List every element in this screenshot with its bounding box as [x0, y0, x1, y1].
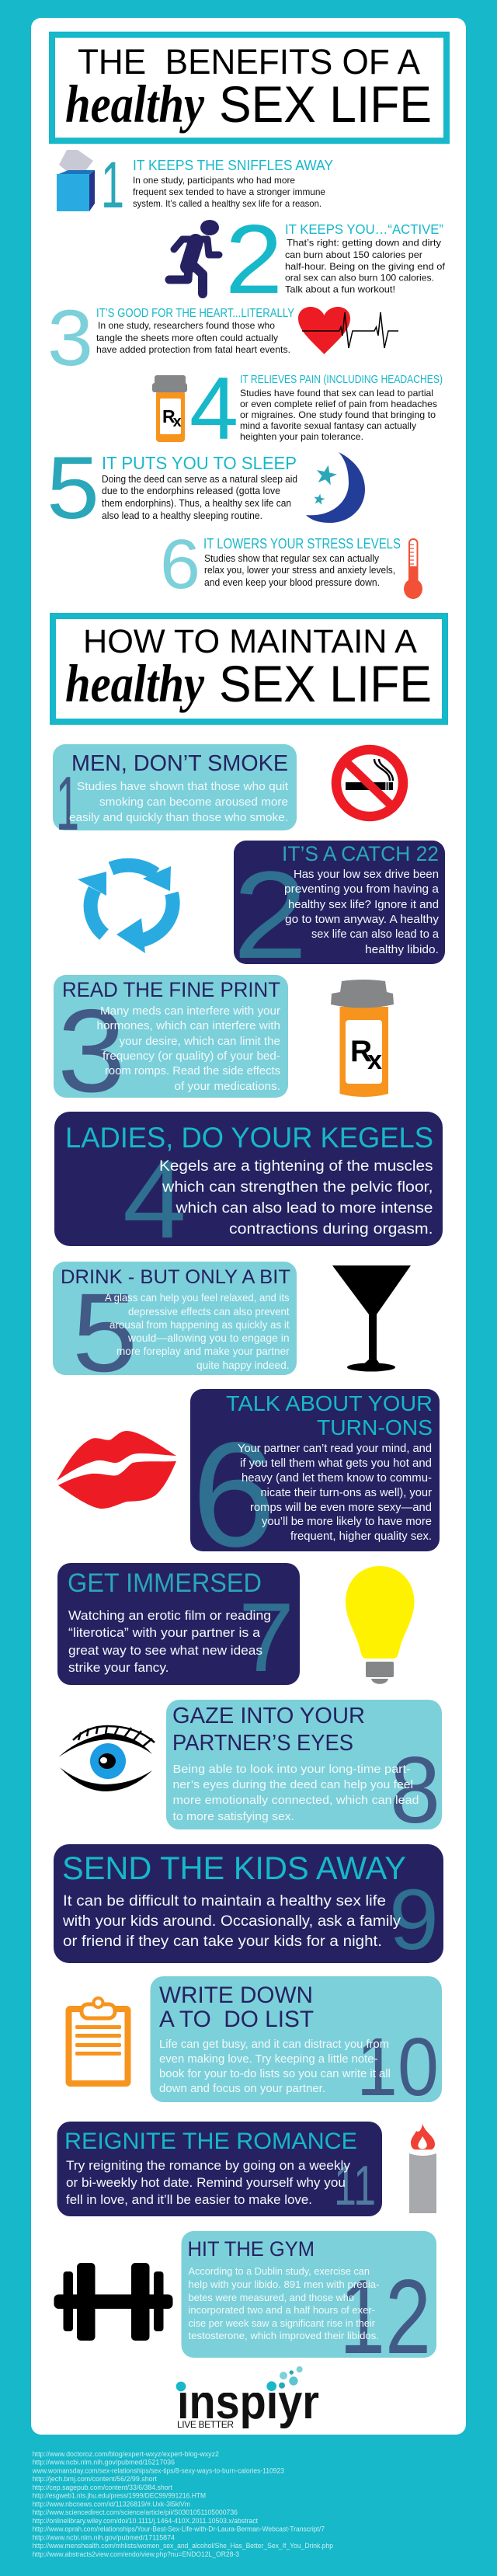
icon: large pill bottle	[331, 980, 394, 1097]
body text: half-hour. Being on the giving end of	[285, 261, 446, 272]
source links: www.womansday.com/sex-relationships/sex-tips/8-sexy-ways-to-burn-calories-110923	[32, 2467, 284, 2475]
icon: large pill bottle: x	[367, 1046, 382, 1075]
body text: Life can get busy, and it can distract you from	[159, 2038, 389, 2051]
body text	[105, 1291, 290, 1371]
source links: http://www.ncbi.nlm.nih.gov/pubmed/15217036	[33, 2459, 175, 2466]
benefit 1: sniffles	[57, 148, 333, 221]
heading: IT KEEPS THE SNIFFLES AWAY	[133, 157, 333, 173]
body text: depressive effects can also prevent	[128, 1305, 290, 1318]
body text: “literotica” with your partner is a	[68, 1625, 261, 1640]
body text: due to the endorphins released (gotta love	[102, 486, 280, 496]
body text: or even complete relief of pain from headaches	[240, 399, 437, 409]
body text	[96, 1004, 280, 1093]
body text: heighten your pain tolerance.	[240, 431, 363, 442]
heading: A TO DO LIST	[159, 2007, 314, 2032]
tip 12 card: hit the gym	[182, 2231, 436, 2376]
body text: betes were measured, and those who	[188, 2292, 354, 2303]
body text: oral sex can also burn 100 calories.	[285, 273, 434, 284]
number 4: 4	[189, 360, 238, 458]
icon: recycle arrows	[78, 865, 173, 953]
body text: which can also lead to more intense	[175, 1200, 433, 1217]
body text: tangle the sheets more often could actually	[96, 332, 278, 343]
body text: room romps. Read the side effects	[105, 1064, 280, 1077]
body text	[66, 2158, 351, 2207]
body text: contractions during orgasm.	[229, 1221, 433, 1238]
number: 9	[389, 1872, 439, 1968]
body text	[68, 1608, 271, 1675]
heading	[226, 1391, 433, 1439]
source links: http://www.oprah.com/relationships/Your-Best-Sex-Life-with-Dr-Laura-Berman-Webcast-Transcript/7	[33, 2526, 325, 2533]
icon: dumbbell	[54, 2263, 172, 2341]
body text: quite happy indeed.	[196, 1359, 290, 1371]
number: 4	[123, 1138, 186, 1262]
body text	[240, 388, 437, 442]
title: the benefits of a healthy sex life: THE BENEFITS OF A	[78, 42, 420, 82]
body text: would—allowing you to engage in	[127, 1332, 290, 1344]
body text: more emotionally connected, which can lead	[172, 1794, 419, 1807]
icon: candle	[409, 2124, 436, 2213]
body text: Has your low sex drive been	[294, 868, 439, 881]
body text: which can strengthen the pelvic floor,	[162, 1179, 433, 1196]
body text: book for your to-do lists so you can write it all	[159, 2068, 391, 2080]
body text: if you tell them what gets you hot and	[240, 1457, 432, 1470]
number: 6	[192, 1411, 276, 1578]
heading: IT’S GOOD FOR THE HEART...LITERALLY	[96, 307, 294, 320]
tip 9 card: send the kids away	[54, 1844, 443, 1968]
title: the benefits of a healthy sex life	[52, 35, 447, 141]
heading: DRINK - BUT ONLY A BIT	[61, 1266, 290, 1288]
icon: thermometer	[404, 539, 422, 599]
number 1: 1	[101, 148, 124, 221]
heading: IT KEEPS YOU…“ACTIVE”	[285, 221, 443, 237]
body text: cise per week saw a significant rise in their	[188, 2317, 376, 2329]
body text: preventing you from having a	[284, 882, 440, 896]
heading: GET IMMERSED	[68, 1568, 262, 1598]
heading: HIT THE GYM	[188, 2237, 315, 2261]
body text: healthy sex life? Ignore it and	[288, 898, 439, 911]
icon: pill bottle: x	[173, 413, 182, 430]
number: 11	[334, 2155, 376, 2217]
tip 2 card: it's a catch 22	[233, 841, 445, 984]
body text: Kegels are a tightening of the muscles	[159, 1158, 433, 1175]
body text: down and focus on your partner.	[159, 2083, 325, 2095]
body text: romps will be even more sexy—and	[250, 1501, 432, 1514]
body text: also lead to a healthy sleeping routine.	[102, 510, 262, 521]
body text: Studies have shown that those who quit	[77, 780, 289, 793]
icon: no smoking	[336, 750, 403, 816]
body text: It can be difficult to maintain a healthy sex life	[63, 1893, 386, 1909]
icon: clipboard	[68, 1998, 127, 2083]
source links: http://jech.bmj.com/content/56/2/99.short	[33, 2475, 157, 2483]
number: 5	[72, 1270, 137, 1395]
body text: or friend if they can take your kids for a night.	[63, 1934, 382, 1950]
body text	[102, 474, 297, 521]
body text: great way to see what new ideas	[68, 1643, 262, 1658]
heading: IT RELIEVES PAIN (INCLUDING HEADACHES)	[240, 373, 443, 386]
body text: Talk about a fun workout!	[285, 284, 395, 295]
source links: http://www.menshealth.com/mhlists/women_sex_and_alcohol/She_Has_Better_Sex_If_You_Drink.php	[33, 2542, 333, 2550]
body text: frequent sex tended to have a stronger immune	[133, 186, 325, 197]
body text: Studies have found that sex can lead to partial	[240, 388, 433, 399]
body text	[159, 2038, 391, 2095]
heading: REIGNITE THE ROMANCE	[64, 2129, 357, 2154]
source links: http://www.doctoroz.com/blog/expert-wxyz/expert-blog-wxyz2	[33, 2450, 219, 2458]
heading	[159, 1982, 314, 2032]
body text: frequent, higher quality sex.	[290, 1530, 432, 1543]
icon: tissue box	[57, 150, 95, 211]
body text: incorporated two and a half hours of exer-	[188, 2304, 375, 2316]
body text: of your medications.	[174, 1080, 280, 1093]
source links	[32, 2450, 333, 2558]
heading: TURN-ONS	[317, 1415, 433, 1439]
number 2: 2	[225, 204, 283, 314]
number: 1	[56, 761, 79, 846]
tip 4 card: ladies, do your kegels	[54, 1112, 443, 1262]
heading: MEN, DON’T SMOKE	[71, 751, 288, 776]
heading: IT’S A CATCH 22	[282, 842, 439, 865]
icon: runner	[169, 220, 219, 294]
body text	[285, 238, 446, 295]
body text	[133, 175, 325, 209]
body text: Watching an erotic film or reading	[68, 1608, 271, 1623]
body text: Doing the deed can serve as a natural sleep aid	[102, 474, 297, 485]
number: 10	[356, 2021, 439, 2113]
number: 7	[238, 1582, 294, 1692]
source links: http://www.nbcnews.com/id/11326819/#.Uxk-3l5klVm	[33, 2500, 190, 2508]
body text	[284, 868, 440, 956]
body text: That’s right: getting down and dirty	[287, 238, 441, 249]
body text: more foreplay and make your partner	[116, 1345, 290, 1357]
icon: heart with pulse	[298, 307, 398, 354]
body text: According to a Dublin study, exercise can	[188, 2265, 370, 2277]
body text: relax you, lower your stress and anxiety levels,	[204, 565, 395, 576]
heading: WRITE DOWN	[159, 1982, 313, 2008]
number 3: 3	[47, 294, 93, 382]
body text	[172, 1763, 419, 1823]
tip 1 card: men, don't smoke	[53, 744, 297, 846]
body text: them endorphins). Thus, a healthy sex life can	[102, 498, 291, 509]
body text: fell in love, and it’ll be easier to make love.	[66, 2192, 312, 2207]
body text: ner’s eyes during the deed can help you feel	[172, 1778, 413, 1791]
body text: healthy libido.	[365, 943, 439, 956]
source links: http://esgweb1.nts.jhu.edu/press/1999/DEC99/991216.HTM	[33, 2492, 206, 2500]
heading: PARTNER’S EYES	[172, 1731, 353, 1756]
source links: http://www.abstracts2view.com/endo/view.php?nu=ENDO12L_OR28-3	[33, 2550, 239, 2558]
body text: your desire, which can limit the	[120, 1035, 280, 1048]
source links: http://www.sciencedirect.com/science/article/pii/S0301051105000736	[33, 2508, 238, 2516]
icon: pill bottle	[152, 375, 187, 442]
body text: even making love. Try keeping a little note-	[159, 2053, 378, 2066]
body text: hormones, which can interfere with	[96, 1019, 280, 1032]
body text	[204, 553, 395, 588]
body text: system. It’s called a healthy sex life for a reason.	[133, 198, 321, 209]
body text: have added protection from fatal heart events.	[96, 344, 290, 355]
heading: READ THE FINE PRINT	[62, 978, 280, 1001]
body text: go to town anyway. A healthy	[285, 913, 440, 926]
body text: Being able to look into your long-time part-	[172, 1763, 410, 1776]
body text: you’ll be more likely to have more	[262, 1515, 432, 1528]
body text: frequency (or quality) of your bed-	[103, 1050, 280, 1063]
body text: with your kids around. Occasionally, ask a family	[62, 1913, 401, 1930]
title: the benefits of a healthy sex life: SEX LIFE	[219, 75, 432, 133]
body text: can burn about 150 calories per	[285, 249, 422, 260]
tip 5 card: drink but only a bit	[53, 1262, 297, 1395]
body text	[188, 2265, 379, 2341]
heading: IT PUTS YOU TO SLEEP	[102, 453, 297, 473]
body text: testosterone, which improved their libidos.	[188, 2330, 379, 2341]
body text: A glass can help you feel relaxed, and its	[105, 1291, 290, 1304]
body text: heavy (and let them know to commu-	[242, 1471, 432, 1485]
benefit 6: stress	[160, 526, 422, 604]
body text: smoking can become aroused more	[99, 795, 288, 809]
body text: help with your libido. 891 men with predia-	[188, 2278, 379, 2290]
source links: http://www.ncbi.nlm.nih.gov/pubmed/17115874	[33, 2534, 175, 2542]
tip 3 card: read the fine print	[54, 975, 288, 1117]
title: how to maintain a healthy sex life	[53, 616, 445, 722]
benefit 3: heart	[47, 294, 398, 382]
body text: easily and quickly than those who smoke.	[69, 811, 288, 824]
source links: http://cep.sagepub.com/content/33/6/384.short	[33, 2484, 172, 2491]
heading	[172, 1704, 365, 1756]
benefit 2: active	[169, 204, 446, 314]
icon: light bulb	[346, 1566, 415, 1684]
body text: nicate their turn-ons as well), your	[261, 1486, 432, 1499]
body text: mind a favorite sexual fantasy can actually	[240, 420, 416, 431]
title: how to maintain a healthy sex life: SEX LIFE	[219, 655, 432, 712]
heading: IT LOWERS YOUR STRESS LEVELS	[203, 536, 401, 552]
icon: moon and stars	[306, 452, 365, 523]
icon: large pill bottle: R	[350, 1035, 372, 1068]
number: 12	[339, 2257, 431, 2376]
number: 3	[57, 985, 126, 1117]
body text: In one study, researchers found those who	[98, 320, 275, 331]
body text	[159, 1158, 433, 1238]
source links: http://onlinelibrary.wiley.com/doi/10.1111/j.1464-410X.2011.10503.x/abstract	[33, 2517, 258, 2525]
body text: and even keep your blood pressure down.	[204, 577, 380, 588]
number 5: 5	[47, 439, 99, 538]
body text: arousal from happening as quickly as it	[109, 1318, 290, 1331]
heading: TALK ABOUT YOUR	[226, 1391, 433, 1415]
tip 8 card: gaze into your partner's eyes	[166, 1700, 442, 1843]
body text	[62, 1893, 401, 1950]
tip 10 card: write down a to do list	[151, 1976, 442, 2113]
heading: LADIES, DO YOUR KEGELS	[65, 1122, 433, 1154]
body text: Your partner can’t read your mind, and	[238, 1442, 432, 1455]
tip 11 card: reignite the romance	[57, 2122, 382, 2217]
body text: Studies show that regular sex can actually	[204, 553, 380, 564]
body text: Try reigniting the romance by going on a weekly	[66, 2158, 351, 2173]
heading: SEND THE KIDS AWAY	[62, 1850, 406, 1886]
number: 8	[390, 1737, 440, 1843]
icon: eye	[59, 1725, 155, 1791]
body text: or migraines. One study found that bringing to	[240, 409, 436, 420]
number 6: 6	[160, 526, 200, 604]
body text: to more satisfying sex.	[172, 1810, 294, 1823]
body text: In one study, participants who had more	[133, 175, 295, 186]
body text: or bi-weekly hot date. Remind yourself why you	[66, 2175, 346, 2190]
title: how to maintain a healthy sex life: HOW TO MAINTAIN A	[83, 623, 417, 660]
body text: strike your fancy.	[68, 1660, 169, 1675]
title: the benefits of a healthy sex life: healthy	[65, 75, 204, 134]
logo: inspiyr live better: inspiyr	[177, 2376, 319, 2429]
number: 2	[233, 845, 308, 984]
icon: lips	[57, 1431, 176, 1509]
tip 7 card: get immersed	[57, 1563, 300, 1692]
heading: GAZE INTO YOUR	[172, 1704, 365, 1728]
body text	[69, 780, 289, 824]
icon: martini glass	[332, 1265, 411, 1372]
body text: sex life can also lead to a	[311, 928, 440, 941]
logo: inspiyr live better: LIVE BETTER	[177, 2419, 234, 2430]
benefit 5: sleep	[47, 439, 365, 538]
title: how to maintain a healthy sex life: healthy	[65, 654, 204, 713]
body text	[96, 320, 290, 355]
body text: Many meds can interfere with your	[100, 1004, 280, 1018]
body text	[238, 1442, 432, 1543]
icon: pill bottle: R	[162, 406, 176, 426]
benefit 4: pain relief	[152, 360, 443, 458]
tip 6 card: talk about your turn-ons	[190, 1389, 440, 1578]
